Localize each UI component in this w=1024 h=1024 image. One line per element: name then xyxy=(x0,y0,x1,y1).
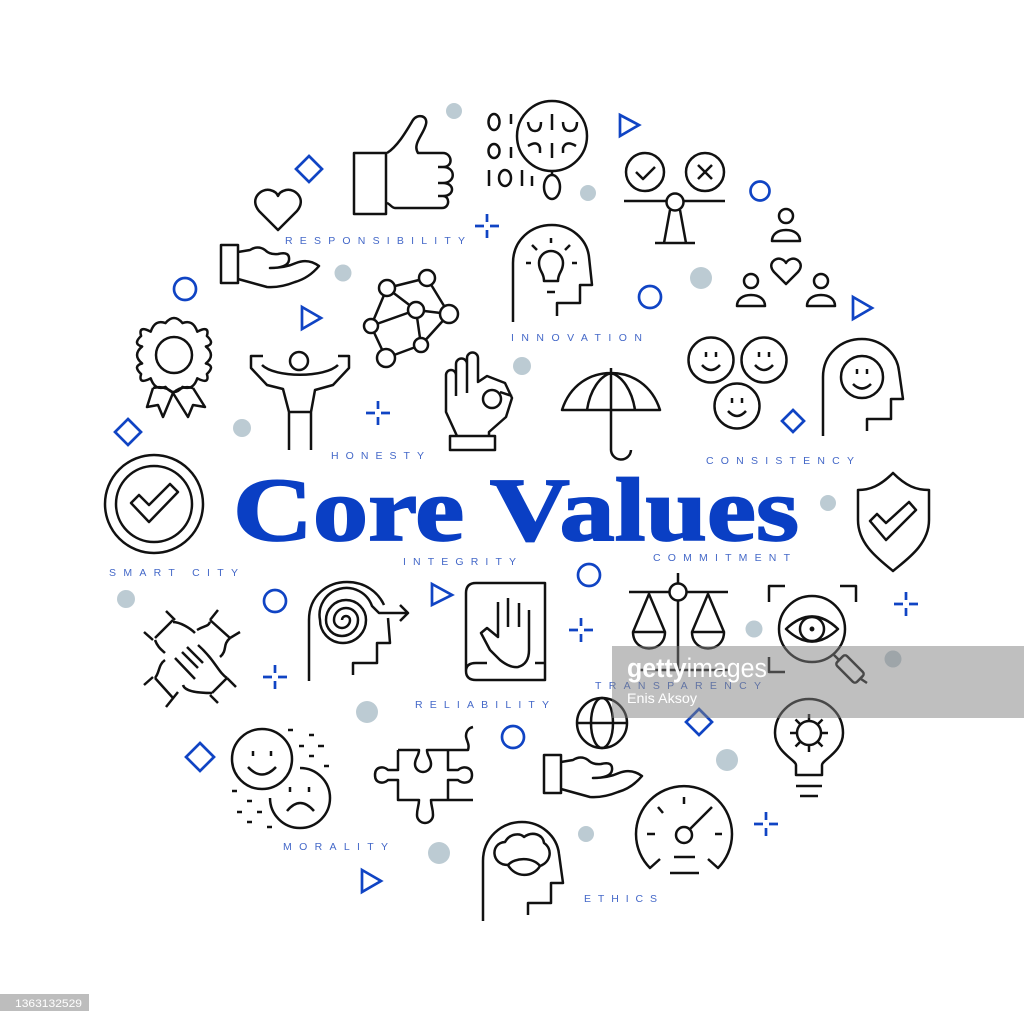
icon: happy and sad faces xyxy=(232,729,330,828)
icon: speedometer xyxy=(636,786,732,873)
grey accent dots xyxy=(117,103,902,864)
label: ethics: ETHICS xyxy=(584,893,657,905)
watermark band: gettyimages xyxy=(627,653,767,683)
icon: globe in open hand xyxy=(544,698,642,797)
icon: shield with check xyxy=(858,473,929,571)
blue accent shapes xyxy=(115,115,918,892)
image id tag: 1363132529 xyxy=(15,998,82,1010)
icon: rosette badge xyxy=(137,318,211,417)
watermark band: Enis Aksoy xyxy=(627,690,697,706)
title: Core Values xyxy=(233,461,799,560)
icon: thumbs up xyxy=(354,116,453,214)
image id tag xyxy=(0,994,89,1011)
label: integrity: INTEGRITY xyxy=(403,556,516,568)
icon: binary magnifier xyxy=(488,101,587,199)
icon: head with smile xyxy=(823,339,903,436)
icon: light bulb with sun xyxy=(775,699,843,796)
icon: strong figure xyxy=(251,352,349,450)
icon: head with brain xyxy=(483,822,563,921)
label: innovation: INNOVATION xyxy=(511,332,642,344)
label: commitment: COMMITMENT xyxy=(653,552,791,564)
label: morality: MORALITY xyxy=(283,841,388,853)
label: transparency: TRANSPARENCY xyxy=(595,680,761,692)
icon: joined hands xyxy=(144,610,240,707)
icon: three smiling faces xyxy=(688,338,786,428)
icon: network xyxy=(364,270,458,367)
icon: puzzle piece xyxy=(375,727,473,823)
icon: heart over open hand xyxy=(221,190,319,287)
label: consistency: CONSISTENCY xyxy=(706,455,854,467)
icon: umbrella xyxy=(562,368,660,460)
icon: circled check xyxy=(105,455,203,553)
label: honesty: HONESTY xyxy=(331,450,424,462)
icon: head with spiral and arrow xyxy=(309,582,408,681)
label: smart city: SMART CITY xyxy=(109,567,238,579)
icon: ok hand xyxy=(446,352,512,450)
heading label: responsibility: RESPONSIBILITY xyxy=(285,235,465,247)
icon: balance check and cross xyxy=(624,153,725,243)
icon: people and heart xyxy=(737,209,835,306)
label: reliability: RELIABILITY xyxy=(415,699,549,711)
icon: eye in magnifier xyxy=(769,586,867,684)
watermark band xyxy=(612,646,1024,718)
icon: head with light bulb xyxy=(513,225,592,322)
icon: scales of justice xyxy=(629,573,728,670)
icon: hand on book xyxy=(466,583,545,680)
